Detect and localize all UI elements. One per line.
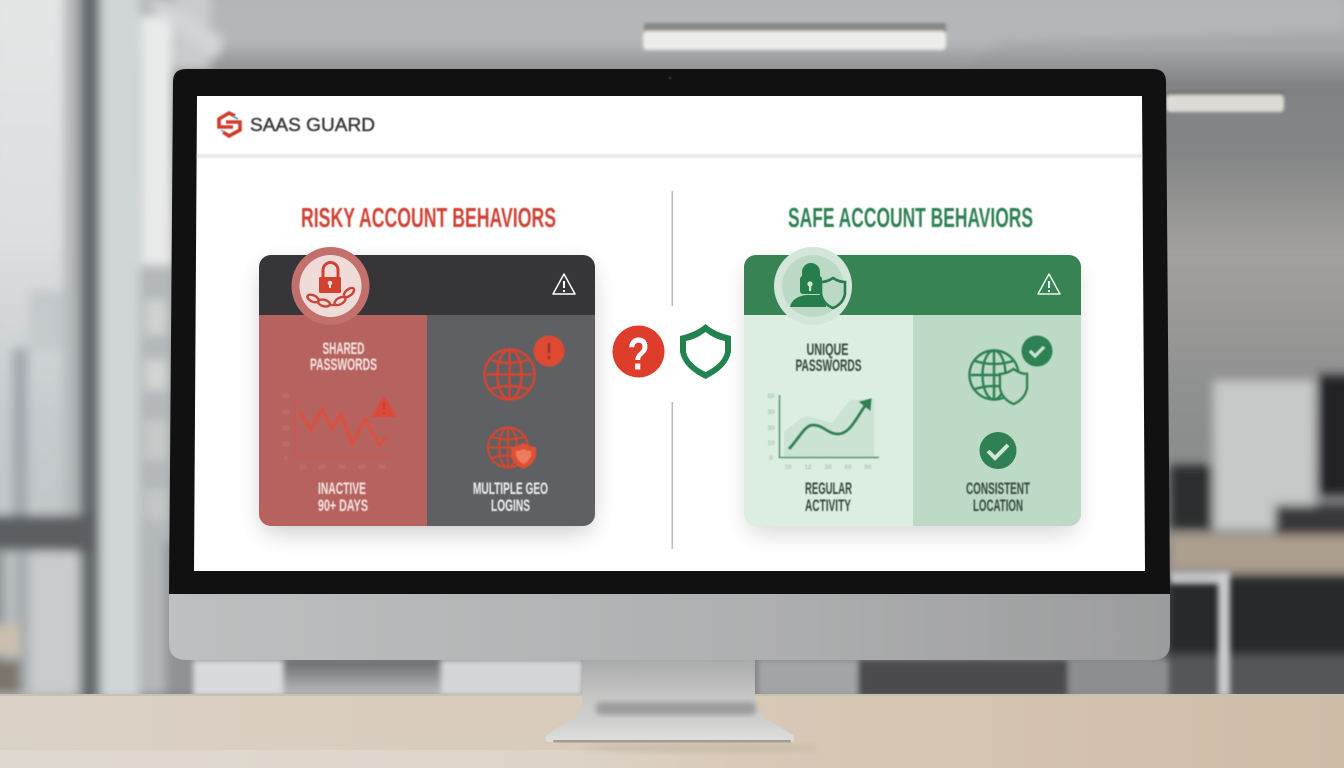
label: inactive 90+ days: INACTIVE xyxy=(318,480,366,498)
brand name: SAAS GUARD xyxy=(250,114,375,135)
icon: globe with alert xyxy=(484,336,564,400)
label: unique passwords: UNIQUE xyxy=(806,341,848,359)
label: unique passwords xyxy=(796,341,862,375)
panel: safe xyxy=(744,247,1081,533)
chart: rising activity: 30 xyxy=(767,425,775,432)
monitor bezel xyxy=(169,69,1170,594)
label: consistent location: LOCATION xyxy=(973,497,1023,515)
icon: question mark xyxy=(612,326,664,380)
heading: safe: SAFE ACCOUNT BEHAVIORS xyxy=(788,202,1033,233)
chart: rising activity: 0 xyxy=(769,455,773,462)
icon: question mark: ? xyxy=(628,328,650,380)
label: consistent location xyxy=(966,480,1030,515)
label: multiple geo logins xyxy=(473,480,548,515)
chart: falling activity: 20 xyxy=(318,464,326,471)
logo icon xyxy=(219,113,240,136)
chart: rising activity: 90 xyxy=(864,464,872,471)
chart: falling activity: 50 xyxy=(282,393,290,400)
panel: risky xyxy=(259,247,595,533)
label: shared passwords: SHARED xyxy=(322,340,365,358)
chart: falling activity: 10 xyxy=(299,464,307,471)
icon: green shield xyxy=(680,324,731,379)
center divider xyxy=(672,191,673,549)
chart: falling activity: 30 xyxy=(282,425,290,432)
chart: rising activity: 10 xyxy=(767,440,775,447)
app header bar xyxy=(197,113,1142,158)
chart: falling activity: 20 xyxy=(282,441,290,448)
label: shared passwords xyxy=(310,340,377,374)
label: consistent location: CONSISTENT xyxy=(966,480,1030,498)
icon: check circle xyxy=(980,432,1016,469)
label: regular activity: ACTIVITY xyxy=(805,497,851,515)
chart: falling activity: 90 xyxy=(378,464,386,471)
chart: rising activity: 60 xyxy=(844,464,852,471)
chart: rising activity: 12 xyxy=(804,464,812,471)
chart: falling activity: 30 xyxy=(338,464,346,471)
chart: rising activity: 30 xyxy=(767,409,775,416)
label: regular activity xyxy=(805,480,852,515)
ceiling lights xyxy=(643,23,1284,112)
chart: falling activity xyxy=(282,393,395,471)
label: inactive 90+ days xyxy=(318,480,368,515)
monitor chin xyxy=(169,590,1170,660)
chart: rising activity: 30 xyxy=(824,464,832,471)
wooden desk xyxy=(0,694,1344,768)
label: unique passwords: PASSWORDS xyxy=(796,357,862,375)
label: shared passwords: PASSWORDS xyxy=(310,356,377,374)
chart: rising activity: 10 xyxy=(784,464,792,471)
label: inactive 90+ days: 90+ DAYS xyxy=(318,497,368,515)
chart: falling activity: 40 xyxy=(282,409,290,416)
chart: rising activity: 50 xyxy=(767,393,775,400)
chart: rising activity xyxy=(767,393,879,471)
icon: padlock and chain xyxy=(292,247,370,325)
icon: globe with shield xyxy=(488,428,536,469)
right office xyxy=(1170,465,1230,530)
label: multiple geo logins: MULTIPLE GEO xyxy=(473,480,548,498)
icon: globe shield and check xyxy=(970,336,1052,404)
screen xyxy=(194,96,1145,571)
ceiling xyxy=(150,0,1344,69)
label: multiple geo logins: LOGINS xyxy=(491,497,530,515)
heading: risky: RISKY ACCOUNT BEHAVIORS xyxy=(301,202,556,233)
label: regular activity: REGULAR xyxy=(805,480,852,498)
warning icon xyxy=(553,274,575,294)
chart: falling activity: 0 xyxy=(284,455,288,462)
monitor stand xyxy=(546,660,794,742)
icon: user lock and shield xyxy=(774,247,852,325)
left window xyxy=(0,0,68,700)
warning icon xyxy=(1038,274,1060,294)
chart: falling activity: 60 xyxy=(358,464,366,471)
